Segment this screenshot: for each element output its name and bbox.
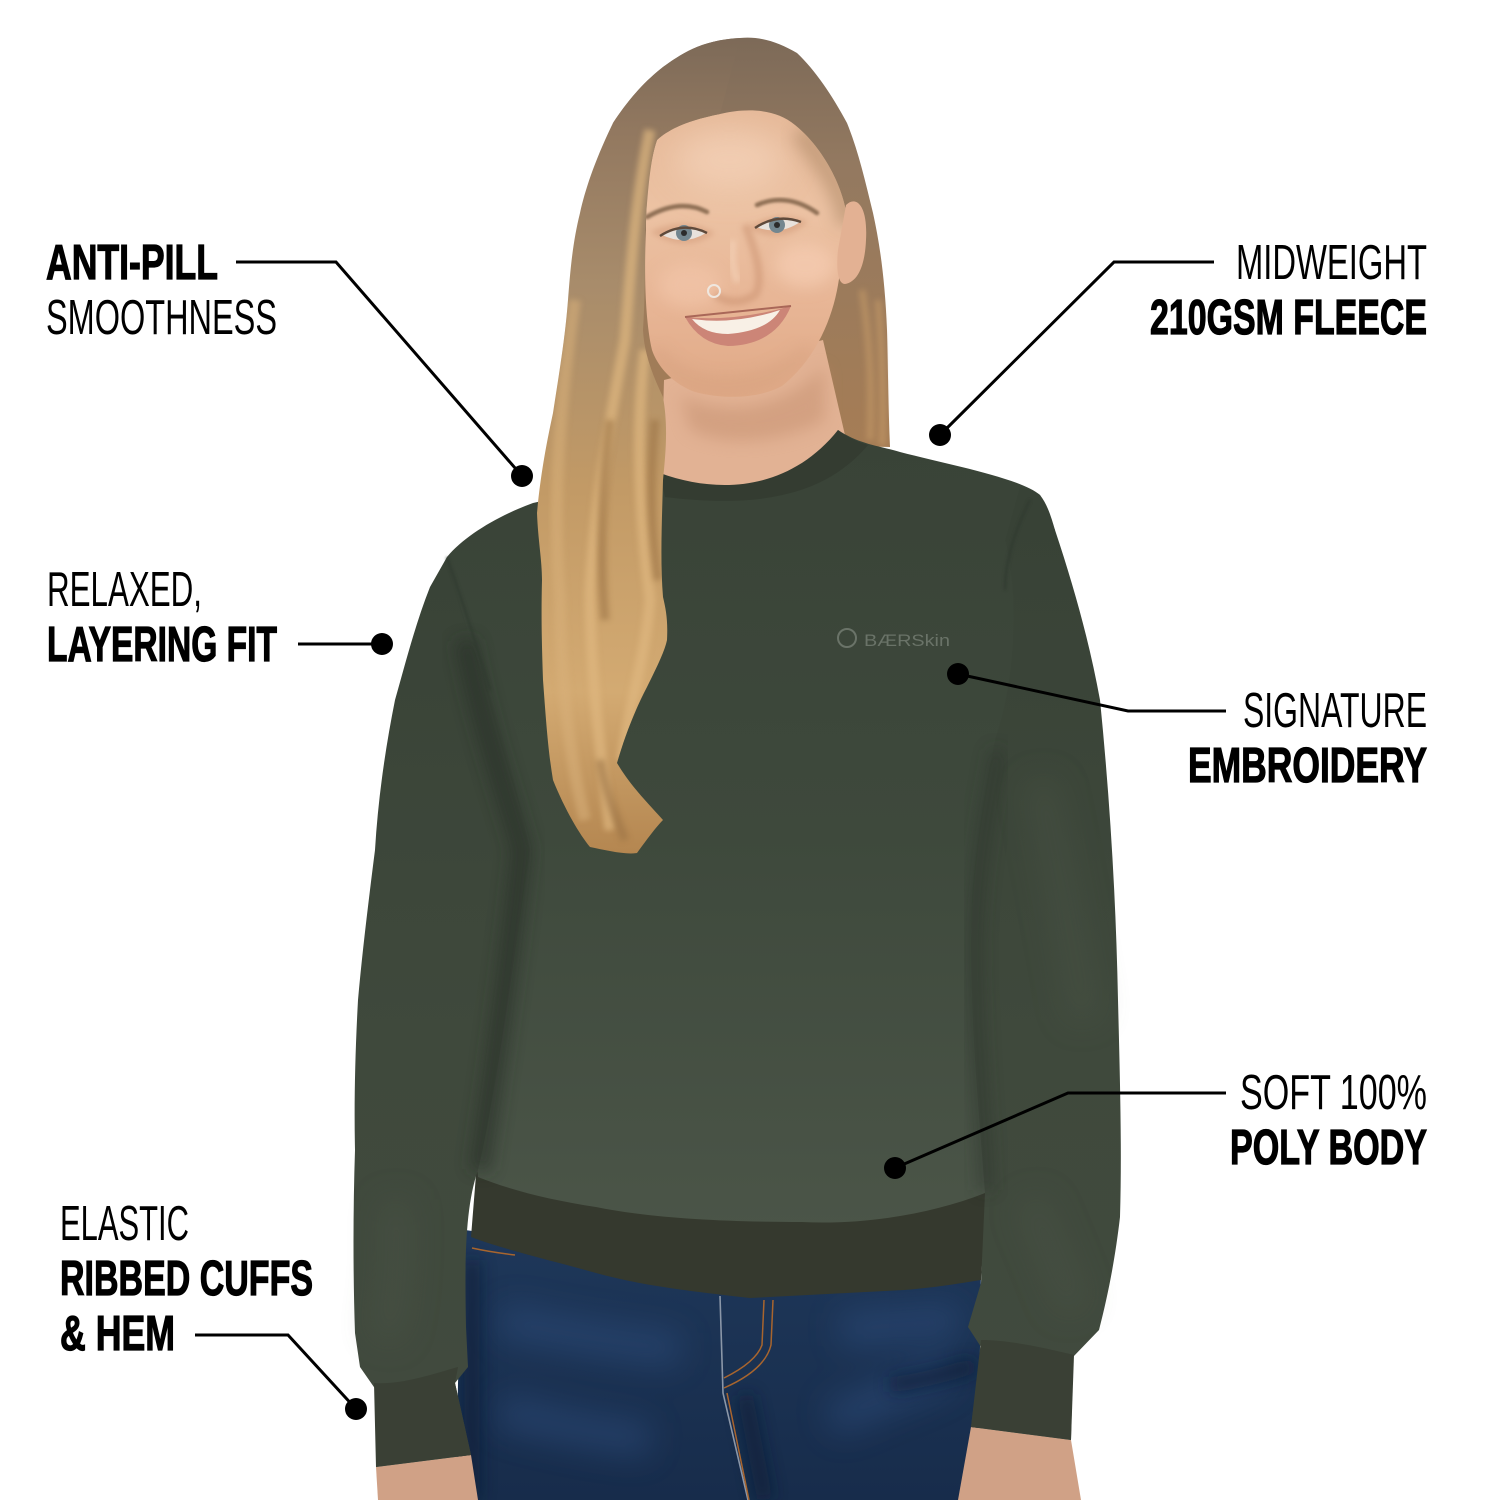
torso: [440, 430, 1055, 1223]
callout: relaxed layering fit: RELAXED,: [47, 563, 202, 617]
left hand: [376, 1455, 478, 1500]
neck: [660, 340, 860, 520]
face: [645, 110, 848, 397]
right cuff: [971, 1340, 1074, 1440]
back hair: [560, 38, 890, 447]
sweatshirt: [354, 430, 1121, 1467]
left cuff: [374, 1367, 471, 1467]
facial shading: [664, 126, 846, 304]
left sleeve: [354, 557, 530, 1467]
long front hair lock: [537, 38, 740, 853]
chest embroidery logo: BÆRSkin: [864, 631, 950, 650]
callout: elastic ribbed cuffs and hem: [60, 1197, 367, 1420]
callout: elastic ribbed cuffs and hem: RIBBED CUFFS: [60, 1252, 313, 1306]
ear: [837, 201, 866, 284]
callout: anti-pill smoothness: [46, 236, 533, 487]
callout: elastic ribbed cuffs and hem: & HEM: [60, 1307, 175, 1361]
sleeve fold highlights: [385, 780, 1085, 1340]
sleeve shadows: [465, 640, 522, 1170]
callout: anti-pill smoothness: SMOOTHNESS: [46, 291, 277, 345]
nose ring: [708, 285, 720, 297]
chest embroidery logo: [838, 629, 950, 650]
fly and stitching: [720, 1296, 748, 1500]
nose: [708, 225, 759, 302]
collar rib: [660, 430, 868, 501]
right hand: [958, 1427, 1081, 1500]
jeans: [456, 1230, 981, 1500]
smile: [685, 306, 791, 346]
callout: anti-pill smoothness: ANTI-PILL: [46, 236, 218, 290]
callout: relaxed layering fit: [47, 563, 393, 672]
chin shadow on neck: [680, 365, 825, 441]
callout: soft 100% poly body: [884, 1066, 1427, 1179]
callout: midweight 210gsm fleece: [929, 236, 1427, 446]
shoulder seams: [447, 500, 1030, 690]
denim highlights and folds: [472, 1260, 975, 1500]
right sleeve: [968, 487, 1121, 1440]
callout: signature embroidery: [947, 663, 1427, 793]
callout: relaxed layering fit: LAYERING FIT: [47, 618, 277, 672]
hair strands: [557, 130, 658, 840]
photo: woman wearing fleece sweatshirt: [354, 38, 1121, 1500]
callout: elastic ribbed cuffs and hem: ELASTIC: [60, 1197, 189, 1251]
eyes and brows: [647, 200, 817, 244]
hem rib: [471, 1150, 990, 1298]
right hair strands: [862, 290, 883, 445]
